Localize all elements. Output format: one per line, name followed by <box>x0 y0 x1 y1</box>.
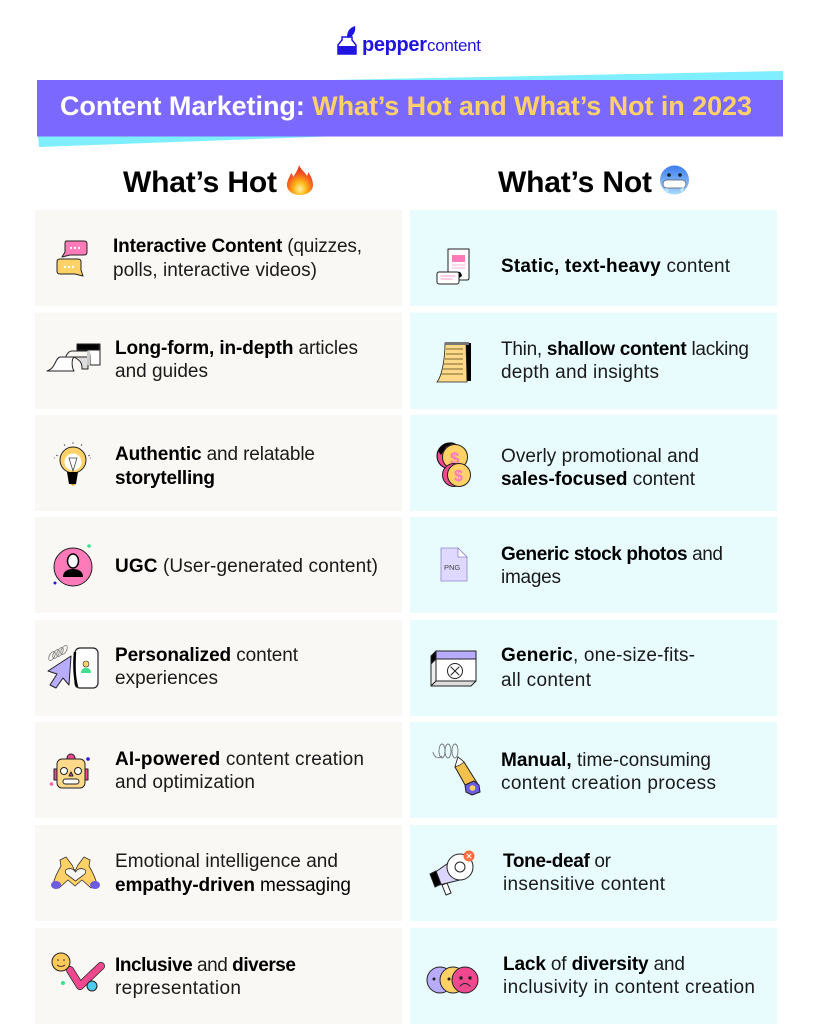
title banner: Content Marketing: What’s Hot and What’s Not in 2023 <box>60 91 752 121</box>
icon: browser window <box>431 651 476 686</box>
text: thin: Thin, shallow content lacking <box>501 339 749 360</box>
text: inclusive <box>115 955 296 999</box>
icon: documents <box>437 249 469 284</box>
text: generic: Generic, one-size-fits- <box>501 645 695 666</box>
text: tone-deaf: Tone-deaf or <box>503 851 612 872</box>
text: manual: Manual, time-consuming <box>501 750 711 771</box>
text: authentic: Authentic and relatable <box>115 444 315 465</box>
text: interactive content: Interactive Content (quizzes, <box>113 236 362 257</box>
text: static: Static, text-heavy content <box>501 256 731 277</box>
text: lack of diversity: inclusivity in content creation <box>503 977 755 998</box>
icon: megaphone <box>430 850 474 895</box>
text: promotional: sales-focused content <box>501 469 696 490</box>
logo: pepper content: pepper <box>362 34 427 56</box>
text: stock photos <box>501 544 723 588</box>
icon: pencil <box>433 744 480 795</box>
icon: check and smiley <box>52 953 101 991</box>
text: interactive content: polls, interactive videos) <box>113 260 317 281</box>
title banner <box>37 71 783 147</box>
text: stock photos: Generic stock photos and <box>501 544 723 565</box>
heading: What's Hot: What’s Hot <box>123 166 277 199</box>
text: generic: all content <box>501 670 592 691</box>
text: emotional intelligence <box>115 851 351 896</box>
text: long-form <box>115 338 358 382</box>
text: authentic <box>115 444 315 489</box>
text: promotional: Overly promotional and <box>501 446 699 467</box>
panel: what's hot <box>35 210 402 1024</box>
text: UGC: UGC (User-generated content) <box>115 556 378 577</box>
icon: long scroll <box>47 344 100 371</box>
heading: What's Not: What’s Not <box>498 166 652 199</box>
icon: user avatar <box>54 544 92 586</box>
icon: cursor and phone <box>47 644 98 688</box>
text: authentic: storytelling <box>115 468 215 489</box>
icon: light bulb <box>54 442 91 486</box>
icon: cold face emoji <box>660 166 689 194</box>
icon: coins <box>437 442 470 486</box>
text: AI-powered <box>115 749 364 793</box>
text: manual: content creation process <box>501 773 716 794</box>
text: lack of diversity: Lack of diversity and <box>503 954 685 975</box>
text: AI-powered: and optimization <box>115 772 255 793</box>
icon: sad faces <box>427 967 478 993</box>
text: stock photos: images <box>501 567 561 588</box>
text: interactive content <box>113 236 362 281</box>
icon: PNG file: PNG <box>444 563 460 572</box>
icon: heart hands <box>51 857 100 889</box>
icon: chat bubbles <box>57 241 87 276</box>
text: lack of diversity <box>503 954 755 998</box>
text: emotional intelligence: Emotional intelligence and <box>115 851 338 872</box>
logo: pepper content: content <box>427 36 481 55</box>
text: thin <box>501 339 749 383</box>
text: promotional <box>501 446 699 490</box>
text: AI-powered: AI-powered content creation <box>115 749 364 770</box>
text: emotional intelligence: empathy-driven messaging <box>115 875 351 896</box>
text: personalized: experiences <box>115 668 218 689</box>
text: long-form: and guides <box>115 361 208 382</box>
text: inclusive: Inclusive and diverse <box>115 955 296 976</box>
icon: robot <box>50 754 90 788</box>
text: long-form: Long-form, in-depth articles <box>115 338 358 359</box>
icon: coins: $ <box>454 468 463 485</box>
text: inclusive: representation <box>115 978 241 999</box>
text: personalized: Personalized content <box>115 645 299 666</box>
logo: pepper content <box>338 26 481 56</box>
icon: notepad <box>437 342 471 382</box>
text: tone-deaf <box>503 851 666 895</box>
text: manual <box>501 750 716 794</box>
text: tone-deaf: insensitive content <box>503 874 666 895</box>
icon: fire emoji <box>287 165 313 195</box>
icon: PNG file <box>441 548 467 581</box>
icon: coins: $ <box>450 449 460 468</box>
text: personalized <box>115 645 299 689</box>
text: thin: depth and insights <box>501 362 659 383</box>
text: generic <box>501 645 695 691</box>
panel: what's not <box>410 210 777 1024</box>
